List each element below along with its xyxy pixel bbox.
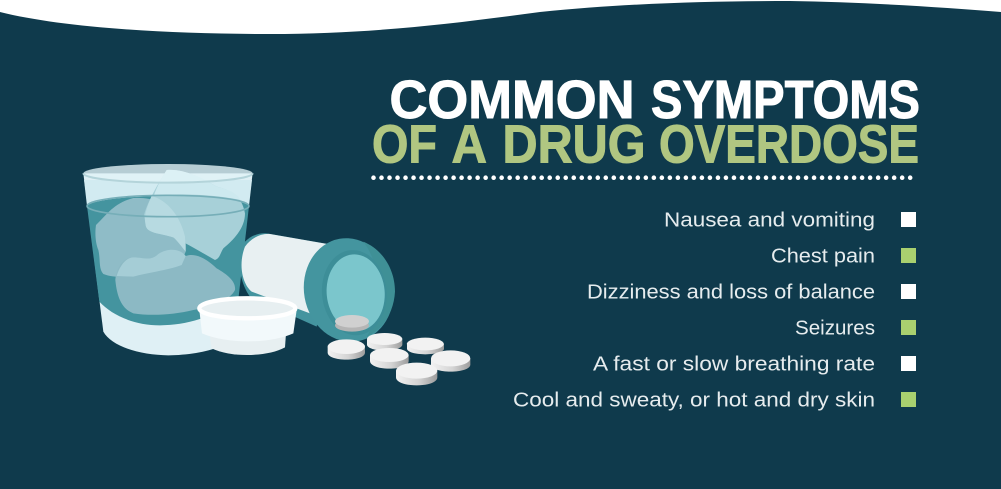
title line 2: OVERDOSE bbox=[659, 116, 919, 174]
title line 1: COMMON bbox=[390, 71, 634, 130]
symptom: chest pain: Chest pain bbox=[771, 246, 875, 268]
title bbox=[372, 71, 920, 174]
title line 2 bbox=[372, 116, 919, 174]
illustration: glass, bottle and pills bbox=[83, 164, 470, 385]
icon: tipped pill bottle bbox=[240, 231, 402, 349]
symptoms list bbox=[513, 210, 916, 412]
symptom: chest pain bbox=[771, 246, 916, 268]
symptom: seizures bbox=[795, 318, 916, 340]
title line 2: A bbox=[452, 116, 487, 174]
title line 2: OF bbox=[372, 116, 437, 174]
icon: glass of water with ice bbox=[83, 164, 253, 355]
symptom: skin: Cool and sweaty, or hot and dry skin bbox=[513, 390, 875, 412]
symptom: seizures: Seizures bbox=[795, 318, 875, 340]
icon: bottle cap bbox=[199, 298, 297, 355]
title line 2: DRUG bbox=[502, 116, 646, 174]
icon: scattered pills bbox=[328, 333, 470, 385]
symptom: dizziness: Dizziness and loss of balance bbox=[587, 282, 875, 304]
symptom: breathing rate: A fast or slow breathing rate bbox=[593, 354, 875, 376]
title line 1 bbox=[390, 71, 920, 130]
symptom: nausea: Nausea and vomiting bbox=[664, 210, 875, 232]
title line 1: SYMPTOMS bbox=[651, 71, 920, 130]
icon: pill inside bottle bbox=[335, 315, 369, 332]
